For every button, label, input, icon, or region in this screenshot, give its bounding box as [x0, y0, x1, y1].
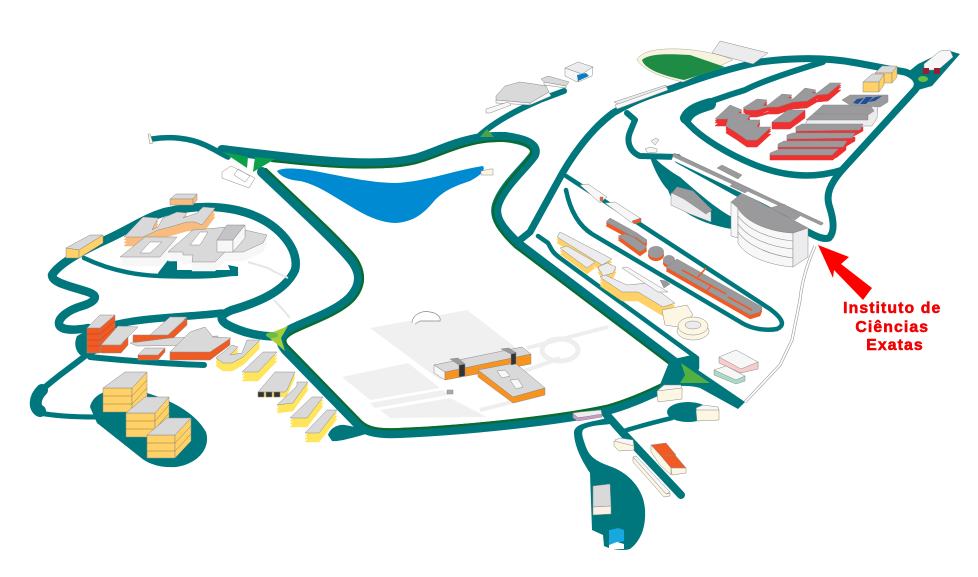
road: science pill loop [566, 176, 782, 330]
road: main loop [152, 91, 680, 433]
yellow buildings chain [216, 340, 337, 442]
road: north-east corner [908, 50, 960, 90]
red arrow [818, 245, 872, 300]
hospital building group [120, 194, 267, 271]
science pill buildings [580, 184, 762, 319]
yellow buildings west of loop [557, 232, 675, 316]
purple building [573, 410, 602, 421]
red building complex [715, 83, 888, 160]
campus plazas and paths [248, 246, 815, 418]
northeast buildings [863, 50, 953, 92]
road: south-east link [657, 354, 745, 409]
pink and green pavilions [714, 350, 758, 384]
teal blobs [75, 330, 100, 358]
green triangle islands [223, 76, 928, 383]
grey building in wedge [671, 187, 712, 222]
central building [434, 347, 545, 403]
north halls [486, 62, 593, 113]
lake [277, 166, 484, 223]
monument arc [412, 312, 440, 324]
label: Instituto de Ciencias Exatas: Instituto de [843, 300, 941, 317]
small building cluster north of strip [645, 138, 659, 153]
teal wedge near central building [650, 155, 732, 229]
Instituto de Ciencias Exatas main building [731, 193, 808, 267]
long north building [614, 85, 668, 109]
annex yellow building [66, 235, 103, 258]
tower 1 [103, 372, 147, 412]
yellow residential towers [103, 372, 191, 458]
road: east avenue [520, 59, 917, 368]
road: west loop [36, 207, 296, 417]
lake kiosk [481, 169, 493, 175]
cream buildings south-east [614, 385, 719, 497]
south grey and blue buildings [593, 484, 624, 549]
tower 2 [126, 397, 169, 437]
orange hospital [87, 315, 231, 360]
northwest gate building [222, 166, 255, 188]
tower 3 [147, 418, 191, 458]
label: Instituto de Ciencias Exatas: Exatas [866, 337, 924, 354]
label: Instituto de Ciencias Exatas: Ciências [855, 319, 929, 336]
orange-roof south building [651, 443, 686, 475]
road: south campus [574, 402, 709, 550]
gate marker [148, 134, 153, 144]
small building near central plaza [447, 390, 453, 394]
cream building with ring [662, 305, 709, 340]
long strip building [673, 155, 822, 228]
stadium [637, 41, 768, 82]
